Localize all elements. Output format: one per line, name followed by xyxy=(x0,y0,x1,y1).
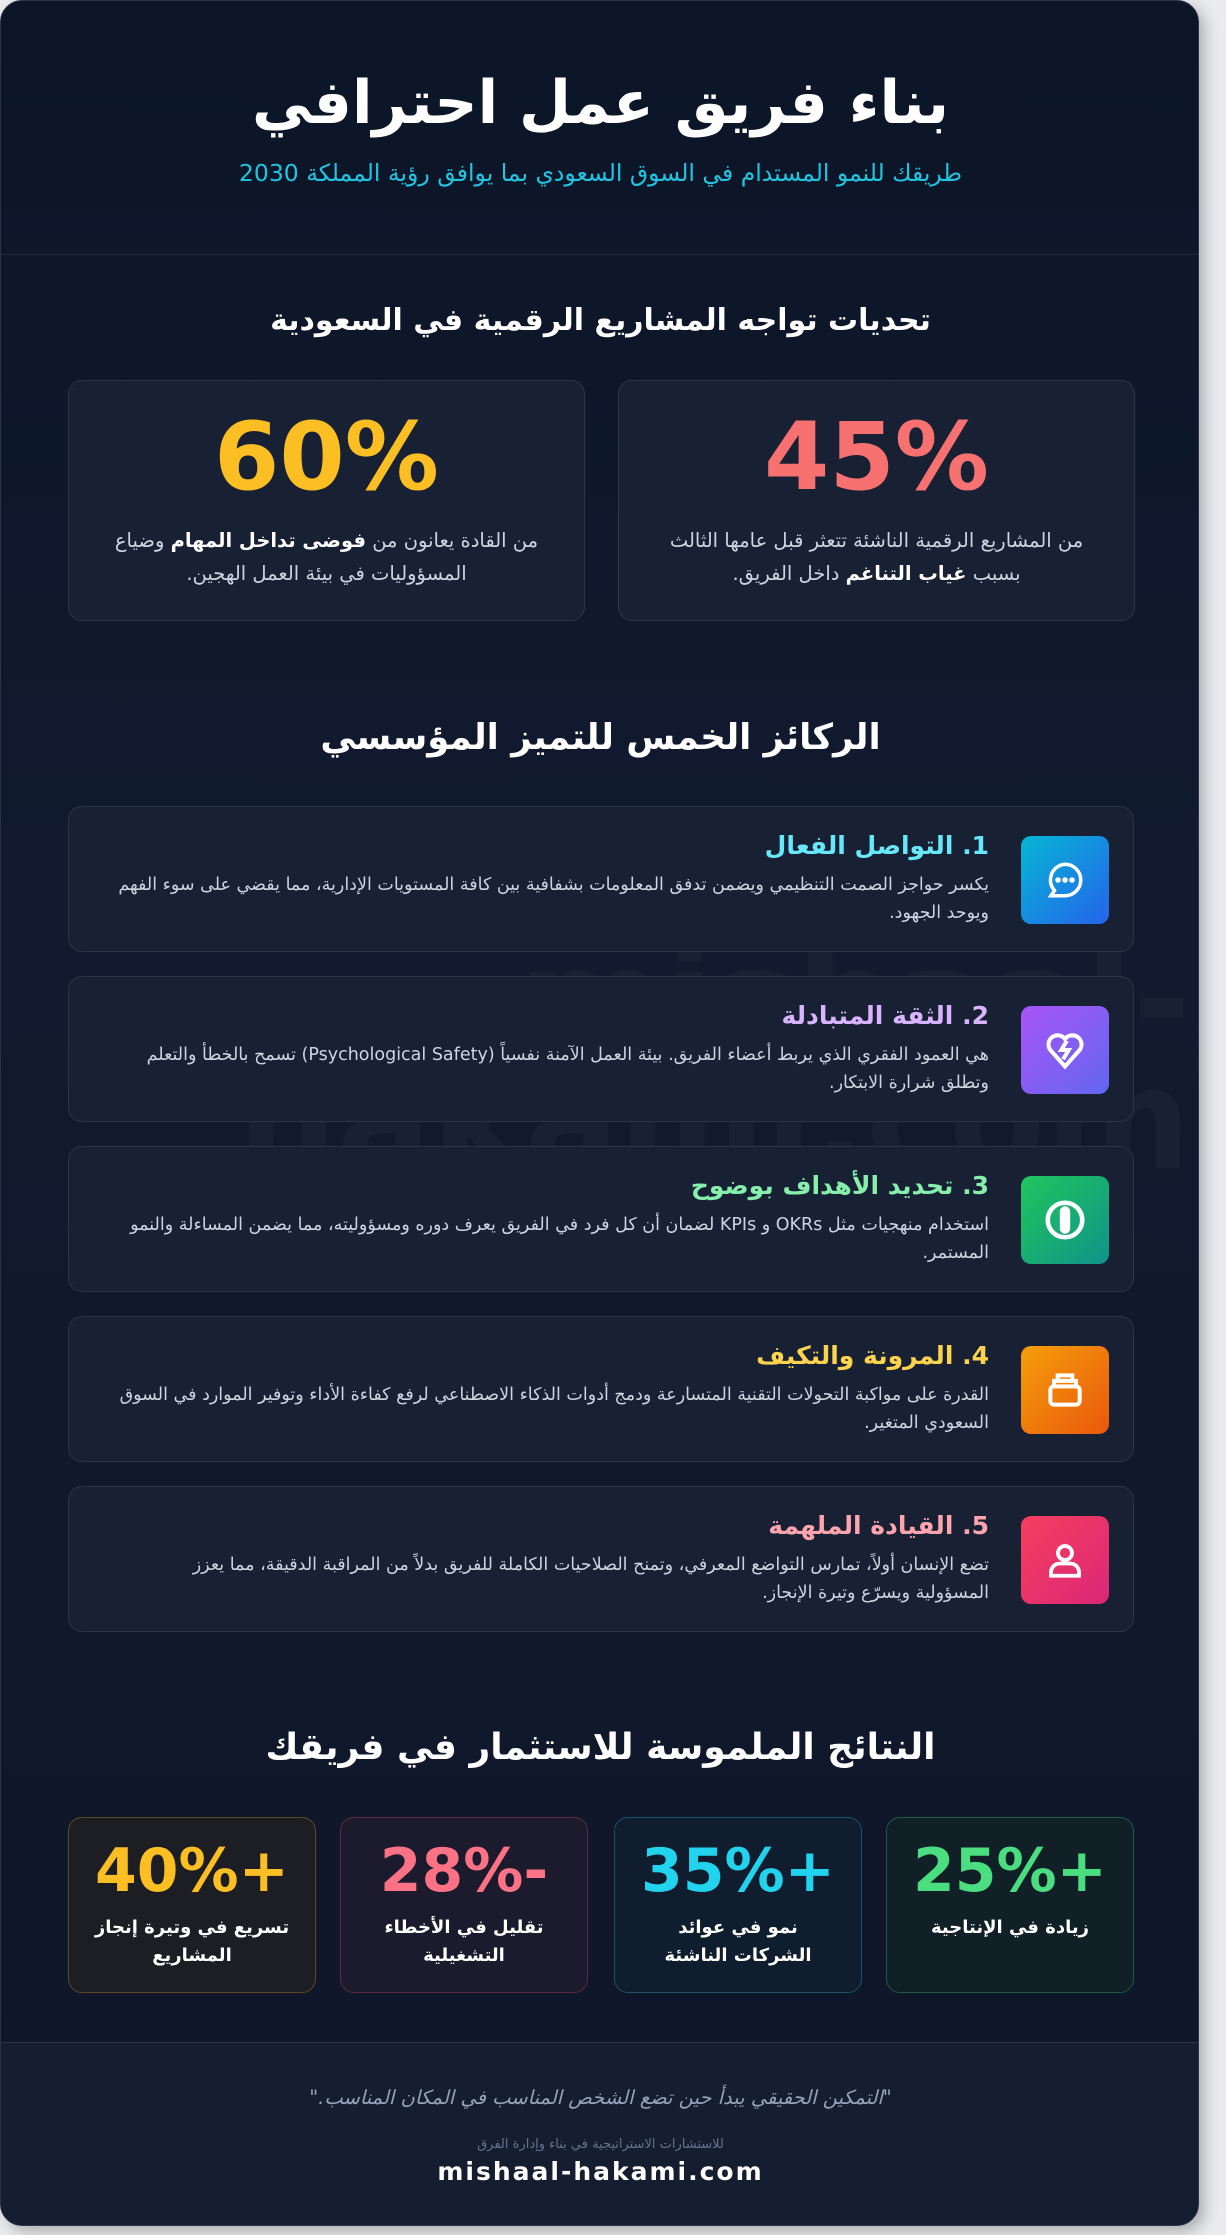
heading: challenges: تحديات تواجه المشاريع الرقمية في السعودية xyxy=(270,303,931,338)
footer small text: للاستشارات الاستراتيجية في بناء وإدارة الفرق xyxy=(477,2137,724,2152)
result: 35%: نمو في عوائد الشركات الناشئة xyxy=(664,1917,812,1966)
stat: 45%: من المشاريع الرقمية الناشئة تتعثر قبل عامها الثالث بسبب غياب التناغم داخل الفريق. xyxy=(670,529,1083,585)
pillar 2: 2. الثقة المتبادلة xyxy=(781,1001,989,1030)
result: 28%: تقليل في الأخطاء التشغيلية xyxy=(384,1917,544,1966)
subtitle: طريقك للنمو المستدام في السوق السعودي بما يوافق رؤية المملكة 2030 xyxy=(239,159,962,187)
icon: person xyxy=(1021,1516,1109,1604)
icon: chat xyxy=(1021,836,1109,924)
result: 40%: تسريع في وتيرة إنجاز المشاريع xyxy=(95,1917,289,1966)
pillar 1: 1. التواصل الفعال xyxy=(765,831,989,860)
result: 28% xyxy=(340,1817,588,1993)
icon: target xyxy=(1021,1176,1109,1264)
result: 40% xyxy=(68,1817,316,1993)
heading: pillars: الركائز الخمس للتميز المؤسسي xyxy=(320,717,881,758)
pillar 5 xyxy=(68,1486,1134,1632)
stat: 60%: من القادة يعانون من فوضى تداخل المهام وضياع المسؤوليات في بيئة العمل الهجين. xyxy=(115,529,538,585)
pillar 2: هي العمود الفقري الذي يربط أعضاء الفريق. بيئة العمل الآمنة نفسياً (Psychological Safety) تسمح بالخطأ والتعلم وتطلق شرارة الابتكار. xyxy=(147,1045,989,1093)
stat: 45% xyxy=(618,380,1135,621)
pillar 5: تضع الإنسان أولاً، تمارس التواضع المعرفي، وتمنح الصلاحيات الكاملة للفريق بدلاً من المراقبة الدقيقة، مما يعزز المسؤولية ويسرّع وتيرة الإنجاز. xyxy=(193,1555,989,1603)
stat: 60% xyxy=(68,380,585,621)
result: 35%: 35%+ xyxy=(641,1836,835,1906)
result: 25%: زيادة في الإنتاجية xyxy=(931,1917,1089,1938)
title: بناء فريق عمل احترافي xyxy=(252,68,949,138)
pillar 3: استخدام منهجيات مثل OKRs و KPIs لضمان أن كل فرد في الفريق يعرف دوره ومسؤوليته، مما يضمن المساءلة والنمو المستمر. xyxy=(130,1215,989,1263)
quote: "التمكين الحقيقي يبدأ حين تضع الشخص المناسب في المكان المناسب." xyxy=(309,2086,892,2109)
heading: results: النتائج الملموسة للاستثمار في فريقك xyxy=(266,1727,935,1768)
pillar 3 xyxy=(68,1146,1134,1292)
result: 25%: 25%+ xyxy=(913,1836,1107,1906)
stat: 45%: 45% xyxy=(764,403,989,512)
result: 40%: 40%+ xyxy=(95,1836,289,1906)
result: 35% xyxy=(614,1817,862,1993)
result: 28%: 28%- xyxy=(380,1836,548,1906)
watermark xyxy=(151,941,1191,1181)
stat: 60%: 60% xyxy=(214,403,439,512)
watermark: hakami.com xyxy=(237,1039,1191,1202)
pillar 1: يكسر حواجز الصمت التنظيمي ويضمن تدفق المعلومات بشفافية بين كافة المستويات الإدارية، مما يقضي على سوء الفهم ويوحد الجهود. xyxy=(118,875,989,923)
pillar 4 xyxy=(68,1316,1134,1462)
footer url: mishaal-hakami.com xyxy=(437,2157,764,2186)
pillar 5: 5. القيادة الملهمة xyxy=(768,1511,989,1540)
pillar 4: 4. المرونة والتكيف xyxy=(756,1341,989,1370)
footer xyxy=(1,2042,1200,2227)
icon: heart xyxy=(1021,1006,1109,1094)
icon: box xyxy=(1021,1346,1109,1434)
pillar 4: القدرة على مواكبة التحولات التقنية المتسارعة ودمج أدوات الذكاء الاصطناعي لرفع كفاءة الأداء وتوفير الموارد في السوق السعودي المتغير. xyxy=(120,1385,989,1433)
pillar 1 xyxy=(68,806,1134,952)
pillar 3: 3. تحديد الأهداف بوضوح xyxy=(691,1171,989,1200)
pillar 2 xyxy=(68,976,1134,1122)
result: 25% xyxy=(886,1817,1134,1993)
watermark: mishaal- xyxy=(519,919,1191,1082)
